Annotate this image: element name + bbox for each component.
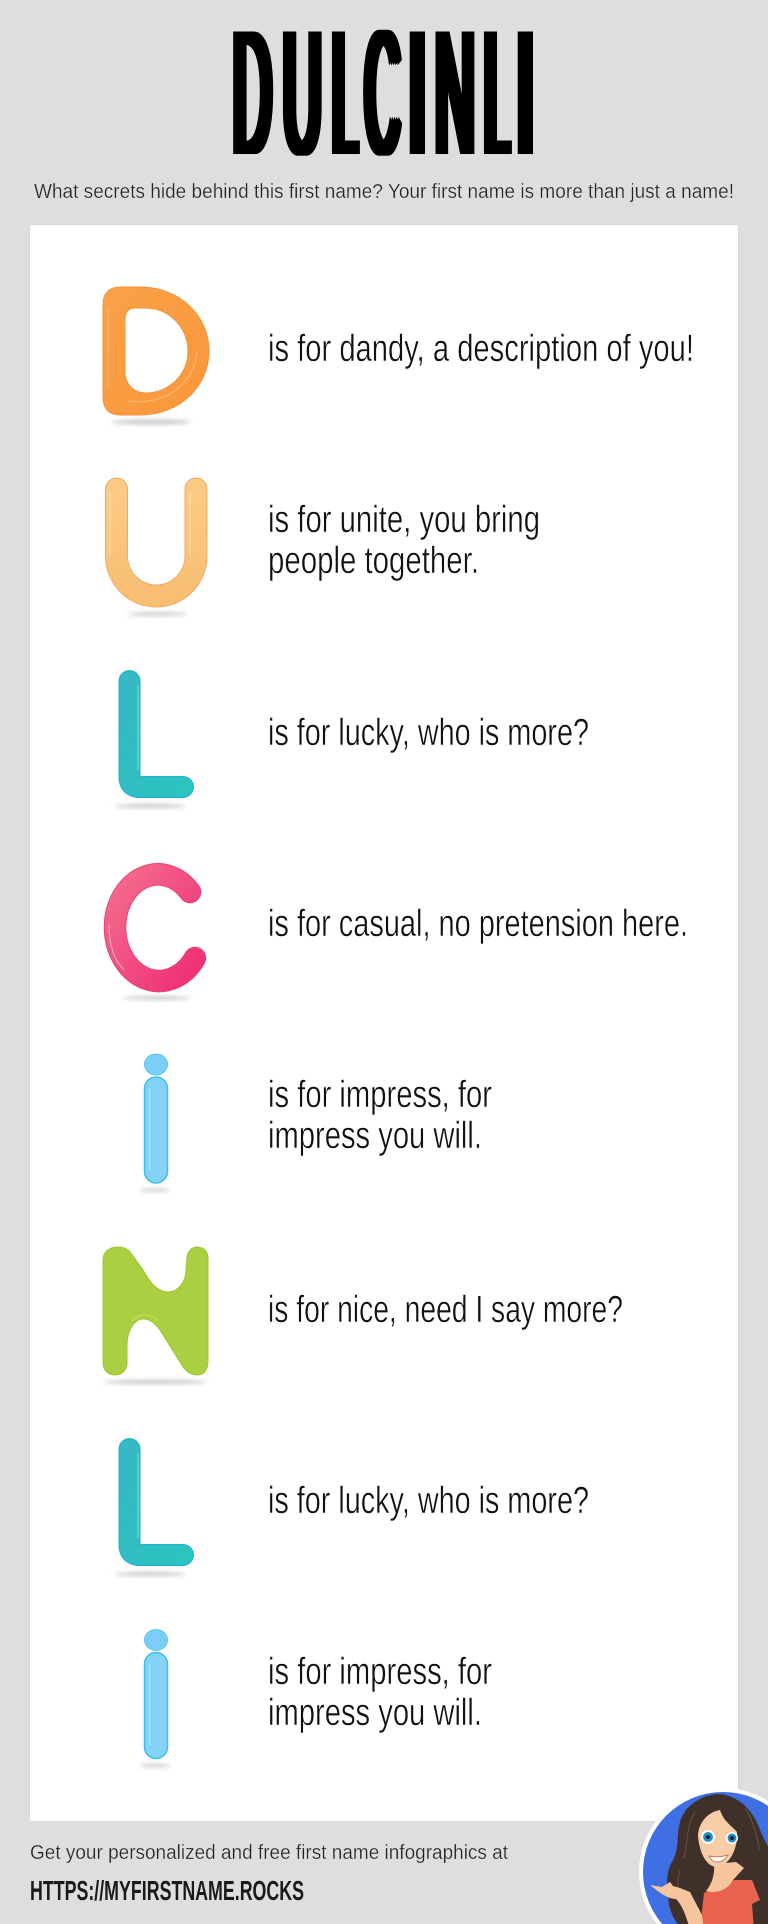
text: second L line: is for lucky, who is more? <box>268 1480 589 1522</box>
letter icon: i <box>140 1054 170 1192</box>
letter icon: N <box>103 1247 208 1384</box>
letter icon: second L <box>114 1449 186 1576</box>
letter icon: L <box>114 681 186 808</box>
text: i lines: impress you will. <box>268 1115 482 1157</box>
text: N line: is for nice, need I say more? <box>268 1289 623 1331</box>
text: second i lines <box>268 1651 492 1734</box>
text: U lines: people together. <box>268 540 479 582</box>
letter icon: second i <box>140 1630 170 1767</box>
letter icon: C <box>109 874 195 1000</box>
footer text: Get your personalized and free first name infographics at <box>30 1842 508 1864</box>
letter icon: D <box>103 287 209 424</box>
letter icon: U <box>110 489 196 616</box>
text: L line: is for lucky, who is more? <box>268 712 589 754</box>
text: U lines: is for unite, you bring <box>268 499 540 541</box>
icon: avatar woman in blue circle <box>639 1788 768 1924</box>
footer url: HTTPS://MYFIRSTNAME.ROCKS <box>30 1875 304 1906</box>
text: U lines <box>268 499 540 582</box>
text: second i lines: is for impress, for <box>268 1651 492 1693</box>
title <box>233 0 537 192</box>
panel: white letters card <box>30 225 738 1821</box>
text: second i lines: impress you will. <box>268 1692 482 1734</box>
text: i lines <box>268 1074 492 1157</box>
text: i lines: is for impress, for <box>268 1074 492 1116</box>
subtitle: What secrets hide behind this first name? Your first name is more than just a name! <box>34 181 734 203</box>
